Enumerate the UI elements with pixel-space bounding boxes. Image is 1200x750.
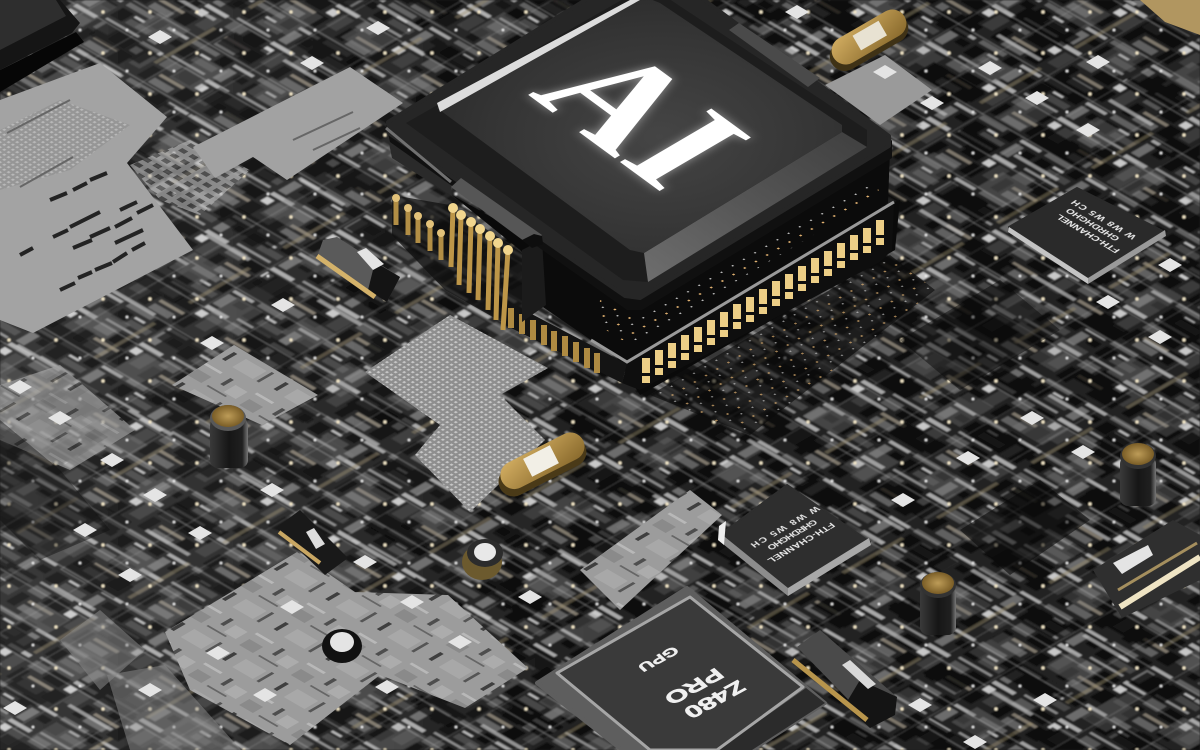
chip drop shadow (452, 195, 900, 395)
top-left black chip (0, 0, 84, 92)
long left pins (451, 208, 508, 330)
rear left pin heads (392, 194, 445, 237)
rim light edge (386, 128, 451, 182)
gold capsule: upper (824, 4, 914, 76)
base plate edge (591, 202, 894, 362)
front left pins (511, 308, 597, 373)
dark zones on the board (0, 255, 1090, 575)
thin traces on grey regions (7, 100, 360, 187)
cylinder capacitor: left (210, 405, 248, 468)
cylinder capacitor: bottom (920, 572, 956, 635)
chip model text second line: PRO (659, 664, 728, 708)
clip end cap (522, 234, 543, 248)
GPU chip (537, 588, 825, 750)
capacitor: white top left (322, 629, 362, 663)
chip label line 1: FTH-CHANNEL (1053, 213, 1122, 254)
logo glow: AI (497, 21, 788, 212)
gold capsule: lower (493, 428, 592, 502)
connector: lower left (276, 510, 348, 575)
chip label line 1: FTH-CHANNEL (765, 521, 837, 565)
right gold pin row (646, 220, 880, 383)
chip model text: Z480 (678, 676, 751, 722)
chip label line 3: W W8 W5 CH (749, 505, 822, 549)
chip label line 2: GHRDHGHO (1064, 207, 1122, 242)
main AI processor (386, 0, 900, 395)
pin floor (392, 195, 525, 335)
lower-left lid clip (451, 178, 542, 247)
chip label line 3: W W8 W5 CH (1069, 198, 1138, 241)
lid rim (388, 0, 889, 298)
white lid highlight (437, 0, 640, 112)
dark dashes on grey regions (20, 173, 153, 290)
logo text: AI: AI (497, 21, 788, 212)
connector: bottom right (1093, 520, 1200, 618)
lid face (437, 0, 842, 253)
pillar wall (522, 240, 546, 322)
top-right gold part (1140, 0, 1200, 35)
upper-right lid clip (729, 23, 820, 87)
chip type text: GPU (634, 644, 682, 674)
internal sparks (598, 178, 880, 345)
memory chip: top right (1008, 188, 1166, 284)
long left pin heads (448, 203, 513, 255)
light grey circuit regions (0, 55, 932, 750)
chip skirt under rim (386, 128, 452, 196)
lid inner well (406, 0, 867, 282)
capacitor: white top centre (462, 539, 503, 580)
connector: bottom centre (793, 630, 897, 728)
rear left pins (396, 198, 441, 260)
internal body (540, 150, 890, 362)
cylinder capacitor: right (1120, 443, 1156, 506)
memory chip: centre (718, 485, 871, 596)
rim underside (386, 125, 892, 310)
left base wall (505, 300, 627, 383)
base wall under plate (622, 204, 894, 390)
lower right bevel (644, 132, 867, 282)
chip label line 2: GHRDHGHO (765, 518, 819, 551)
connector: upper left (317, 237, 400, 302)
